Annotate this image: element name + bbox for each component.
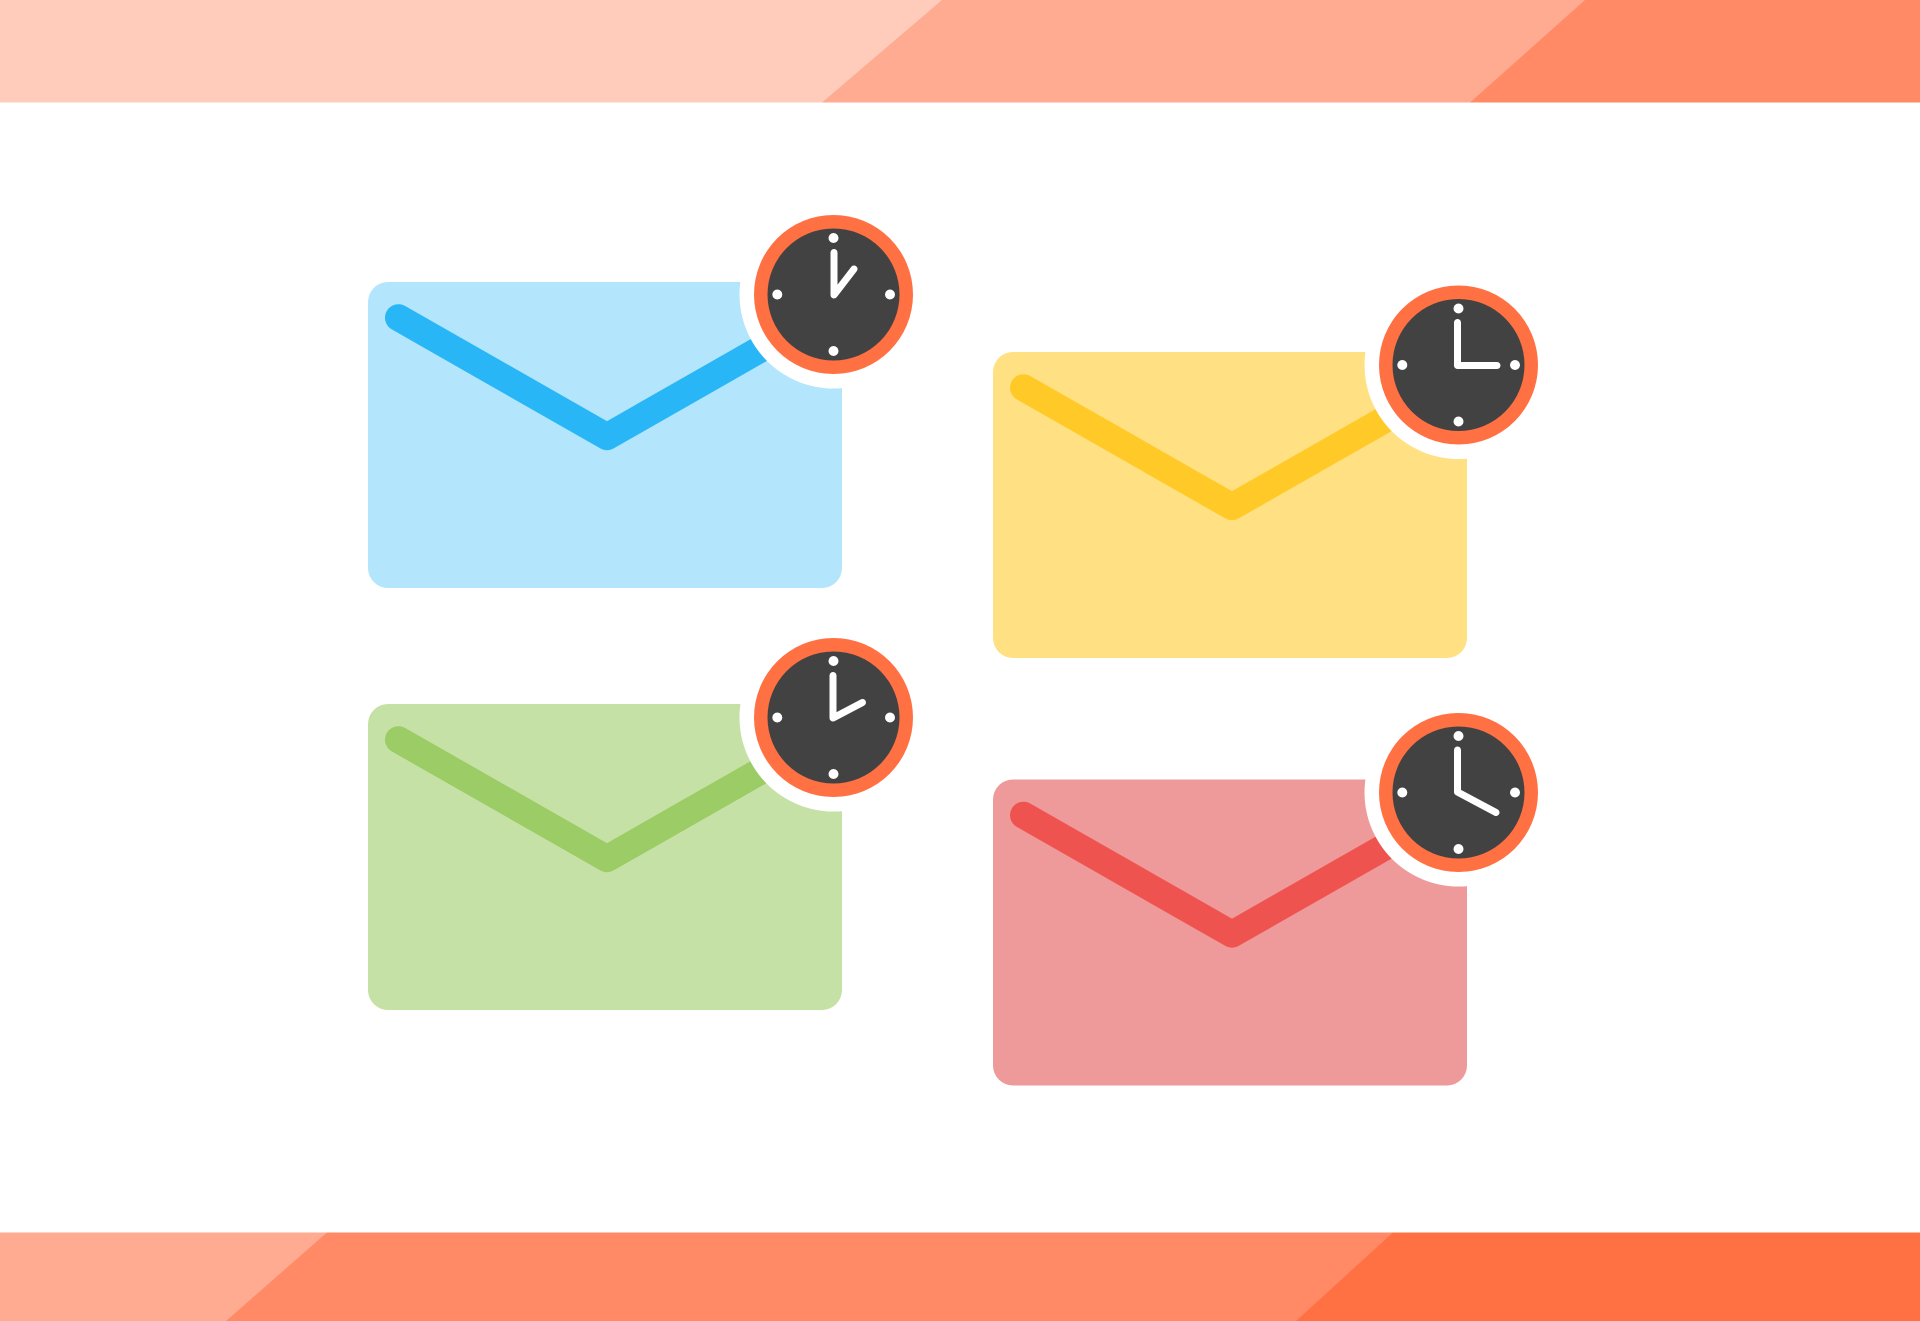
panel: red envelope with clock (993, 698, 1552, 1086)
envelope flap: green (398, 740, 800, 859)
bottom banner (0, 1232, 1920, 1321)
clock: four o'clock (1364, 698, 1552, 886)
envelope flap: red (1024, 815, 1425, 934)
envelope body: red (993, 780, 1467, 1086)
top banner (0, 0, 1920, 102)
panel: blue envelope with clock (368, 200, 928, 588)
envelope body: green (368, 704, 842, 1010)
envelope flap: blue (398, 318, 800, 437)
envelope flap: yellow (1024, 388, 1425, 507)
envelope body: yellow (993, 352, 1467, 658)
panel: yellow envelope with clock (993, 271, 1552, 658)
clock: three o'clock (1364, 271, 1552, 459)
clock: two o'clock (740, 624, 928, 812)
panel: green envelope with clock (368, 624, 928, 1010)
envelope body: blue (368, 282, 842, 588)
clock: one o'clock (740, 200, 928, 388)
